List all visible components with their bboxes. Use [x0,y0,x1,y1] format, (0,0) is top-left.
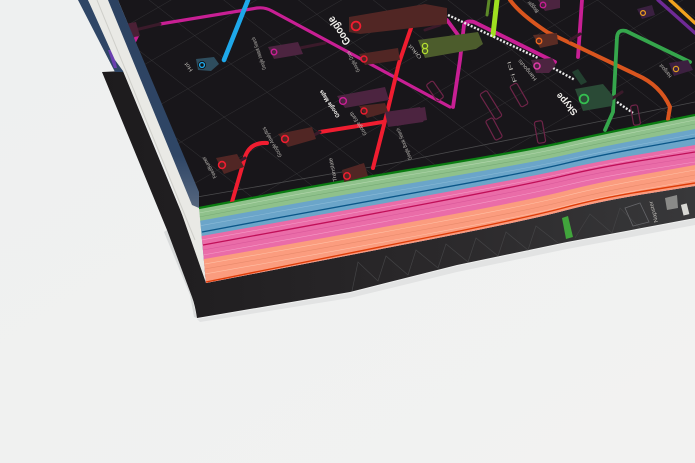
faint lime line [487,0,489,15]
station labels: Hangouts [517,58,539,82]
station labels [183,0,674,182]
outlined labels [426,81,641,144]
grey translucent edge of lower book [164,230,197,318]
station labels: Translate [328,157,339,182]
station: bottom-left purple [385,107,426,127]
white page edge [88,0,206,283]
station labels: Skype [554,90,580,117]
page edge stack [199,116,695,283]
metro map [133,0,695,202]
station labels: Hot [183,60,195,72]
station labels: Orkut [407,43,423,60]
lower book: spine label: Napster [648,200,660,223]
station labels: Google Book Search [396,127,414,160]
station labels: Google Earth [349,110,369,136]
green band [199,116,695,283]
left blue back cover edge [78,0,126,72]
red lines [232,28,411,202]
station labels: Google Instant Search [251,36,268,70]
blue band [200,129,695,283]
lower book: grid lines [352,208,640,291]
page lines [196,120,695,276]
lower book: green tab [562,216,573,239]
station: translate [342,163,368,182]
station labels: Google Analytics [261,125,284,158]
page edge highlight [97,0,195,240]
purple line top right [658,0,695,33]
stations [125,0,693,182]
magenta line [160,8,450,107]
blue spine of top cover [108,0,199,208]
station: magenta centre [531,58,556,73]
lower book: spine label [625,195,689,226]
green edge line [199,115,695,208]
station: maroon docs [359,48,400,65]
pink band [202,145,695,283]
station: purple right [390,107,427,126]
station labels: Google [326,14,353,47]
station: top purple [538,0,560,11]
soft shadow under the book [197,219,695,322]
grid pattern [131,0,695,197]
pink edge line [203,152,695,245]
station labels: Hangout [658,62,674,79]
chequered line [448,15,633,113]
station: cyan [196,57,219,71]
blue edge line [202,138,695,232]
purple sliver [108,50,117,68]
orange band [204,165,695,283]
station labels: FeedBurner [201,155,219,179]
station: Skype green [575,84,613,111]
lime line [493,0,497,35]
top cover [118,0,695,210]
amber line top right [670,0,695,23]
station: purple instant search [268,42,303,59]
station: maroon earth [359,103,388,118]
station: right purple [669,60,693,76]
cover border line [197,102,695,197]
station: analytics [278,127,316,147]
station: purple maps [337,87,389,108]
magenta branches [133,0,582,107]
photo of book corner [78,0,695,322]
station: olive [418,32,483,58]
station: orange [533,33,558,48]
red edge line [206,183,695,282]
station labels: Google Maps [318,88,342,118]
station labels: Fi Fi [507,60,519,83]
lower book: grey icon [665,195,678,210]
lower book [102,71,695,318]
station: maroon top-left [125,22,140,38]
green line [605,31,690,130]
station labels: Google Docs [346,50,362,73]
station: small green [572,69,587,85]
station: top right [637,5,655,19]
cyan line [224,0,248,60]
orange line [510,0,670,119]
dark connectors [135,24,622,162]
station: Google large [349,4,447,34]
station: feedburner [216,154,244,174]
